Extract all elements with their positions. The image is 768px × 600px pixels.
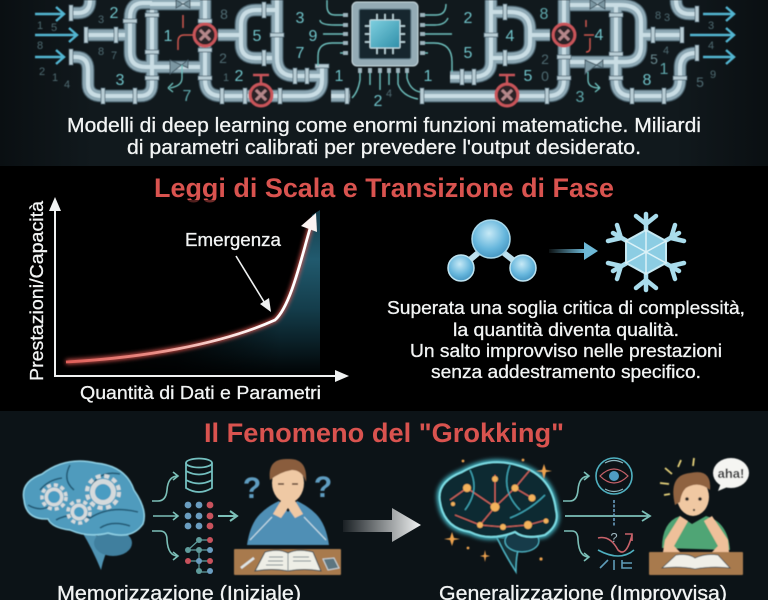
arrows: generalization branches — [563, 472, 650, 561]
parameter numbers: 7 — [111, 50, 117, 62]
parameter numbers: 3 — [296, 10, 305, 27]
brain outline — [439, 462, 557, 537]
icon: node network — [185, 537, 213, 574]
x axis label: Quantità di Dati e Parametri — [80, 382, 321, 403]
pipes — [70, 0, 698, 96]
sparkles — [444, 459, 552, 562]
panel: bottom section background — [0, 411, 768, 600]
student hair — [270, 459, 306, 482]
parameter numbers: 8 — [220, 6, 228, 22]
icon: snowflake — [608, 214, 684, 290]
brain stem and cerebellum — [82, 532, 112, 570]
text block: critical threshold: la quantità diventa qualità. — [453, 319, 679, 340]
pencil — [241, 558, 254, 568]
callout arrow — [236, 256, 271, 312]
icon: eye in circle — [596, 458, 632, 494]
parameter numbers: 1 — [52, 72, 58, 84]
student head — [272, 463, 304, 503]
text block: critical threshold: senza addestramento specifico. — [431, 361, 701, 382]
y axis arrowhead — [49, 197, 61, 211]
icon: central processor chip — [352, 2, 418, 66]
question marks: ? — [243, 472, 261, 505]
parameter numbers: 5 — [650, 51, 658, 67]
parameter numbers: 1 — [424, 68, 433, 85]
curve glow — [66, 222, 312, 362]
heading: scale laws and phase transition: Leggi di Scala e Transizione di Fase — [154, 173, 614, 203]
illustration: memorization brain with gears — [23, 461, 144, 570]
curve arrowhead — [301, 213, 317, 232]
calculator — [323, 558, 339, 570]
parameter numbers: 2 — [235, 68, 244, 85]
desk — [234, 549, 341, 575]
parameter numbers: 8 — [540, 6, 549, 23]
panel: top section background — [0, 0, 768, 166]
y axis label: Prestazioni/Capacità — [26, 200, 47, 381]
parameter numbers: 2 — [39, 66, 45, 78]
parameter numbers: 2 — [110, 5, 119, 22]
chart area under curve — [120, 210, 320, 374]
student hands — [273, 499, 303, 518]
parameter numbers: 1 — [660, 61, 669, 78]
text block: deep learning description: di parametri calibrati per prevedere l'output desiderato. — [127, 136, 641, 159]
circuit traces — [318, 0, 452, 99]
illustration: confused student — [234, 459, 341, 575]
synapse lines — [450, 470, 546, 527]
parameter numbers: 3 — [576, 89, 585, 106]
arrow: from memorization to generalization — [343, 508, 421, 542]
neon glow — [439, 462, 557, 537]
x axis arrowhead — [335, 370, 349, 382]
parameter numbers: 0 — [541, 68, 549, 84]
pipe collars — [69, 2, 699, 104]
parameter numbers: 5 — [464, 45, 473, 62]
parameter numbers: 1 — [223, 72, 229, 84]
gate valves on horizontal pipes — [170, 0, 605, 74]
parameter numbers: 1 — [164, 28, 173, 45]
text block: deep learning description: Modelli di deep learning come enormi funzioni matematiche. Miliardi — [67, 114, 701, 137]
parameter numbers: 8 — [655, 10, 661, 22]
parameter numbers: 4 — [663, 45, 669, 57]
illustration: enlightened student — [649, 458, 749, 575]
input arrows — [35, 7, 77, 64]
icon: function graphs: ? — [610, 530, 618, 545]
parameter numbers: 5 — [524, 68, 533, 85]
desk — [649, 552, 743, 575]
arrow: phase change — [549, 242, 598, 260]
icon: function graphs — [598, 530, 634, 570]
parameter numbers: 2 — [219, 50, 227, 66]
parameter numbers: 4 — [506, 28, 515, 45]
student arms — [663, 516, 688, 552]
student closed eyes — [278, 483, 298, 485]
text block: critical threshold — [387, 297, 745, 382]
student eyes and mouth — [685, 497, 702, 511]
gears — [42, 476, 119, 523]
aha speech bubble: aha! — [718, 466, 744, 481]
parameter numbers: 7 — [183, 88, 192, 105]
parameter numbers: 3 — [708, 20, 714, 32]
text block: critical threshold: Un salto improvviso nelle prestazioni — [410, 340, 722, 361]
student hair — [673, 472, 710, 505]
parameter numbers: 3 — [664, 12, 670, 24]
output arrows — [690, 7, 734, 64]
callout: emergence: Emergenza — [185, 229, 282, 250]
text block: critical threshold: Superata una soglia critica di complessità, — [387, 297, 745, 318]
parameter numbers: 4 — [386, 88, 392, 100]
insight rays — [660, 458, 694, 495]
parameter numbers: 4 — [595, 27, 604, 44]
icon: water molecule — [448, 220, 536, 281]
chart: performance against data and parameters — [26, 197, 349, 403]
parameter numbers: 2 — [464, 10, 473, 27]
parameter numbers — [37, 5, 716, 110]
illustration: confused student: ? — [314, 471, 332, 504]
icon: database — [186, 458, 212, 492]
red valves — [168, 15, 600, 106]
icon: dot grid — [185, 502, 213, 529]
parameter numbers: 1 — [37, 20, 43, 32]
parameter numbers: 7 — [296, 45, 305, 62]
heading: grokking phenomenon: Il Fenomeno del "Grokking" — [204, 418, 564, 448]
parameter numbers: 5 — [253, 28, 262, 45]
parameter numbers: 8 — [98, 46, 104, 58]
brain body — [23, 461, 144, 535]
student sweater — [247, 501, 329, 545]
parameter numbers: 5 — [696, 74, 704, 90]
y axis — [54, 205, 56, 377]
text block: deep learning description — [67, 114, 701, 159]
student head — [677, 478, 709, 516]
parameter numbers: 9 — [710, 69, 716, 81]
brain stem — [497, 538, 522, 572]
curve line — [66, 222, 312, 362]
illustration: generalization neon brain — [439, 459, 557, 572]
parameter numbers: 4 — [708, 40, 714, 52]
panel: middle section background — [0, 166, 768, 411]
x axis — [54, 375, 338, 377]
parameter numbers: 3 — [98, 14, 104, 26]
parameter numbers: 3 — [116, 72, 125, 89]
parameter numbers: 8 — [643, 72, 652, 89]
open book — [255, 550, 321, 571]
parameter numbers: 9 — [309, 28, 318, 45]
parameter numbers: 2 — [541, 51, 549, 67]
parameter numbers: 2 — [374, 93, 383, 110]
student shirt — [662, 516, 730, 550]
arrows: memorization branches — [152, 472, 237, 560]
parameter numbers: 5 — [51, 22, 57, 34]
diagram: pipe network as mathematical function — [35, 0, 734, 110]
parameter numbers: 4 — [64, 79, 70, 91]
glowing nodes — [451, 476, 548, 530]
parameter numbers: 8 — [37, 40, 43, 52]
parameter numbers: 1 — [335, 68, 344, 85]
chip pins — [343, 13, 425, 73]
open book — [662, 554, 730, 569]
